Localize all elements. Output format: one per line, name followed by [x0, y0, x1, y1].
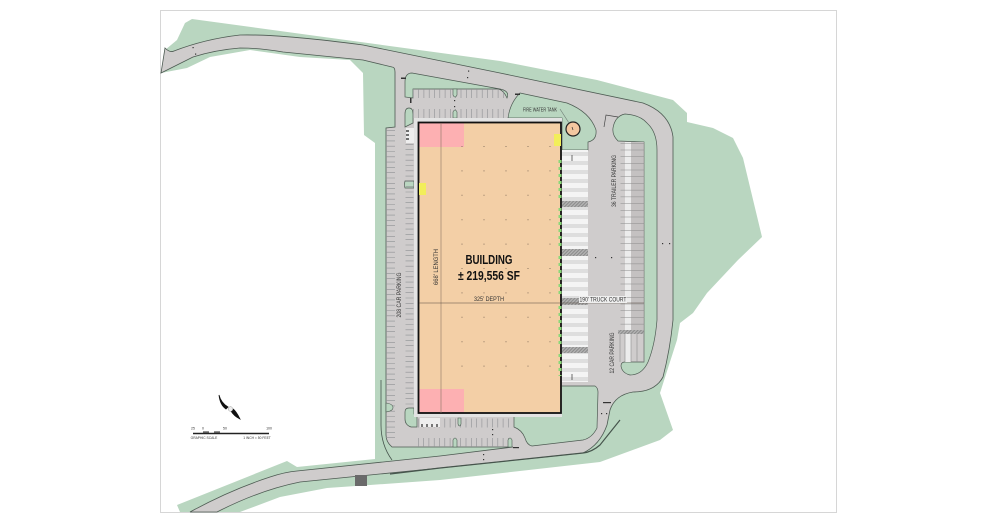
length label: 668' LENGTH [434, 249, 440, 285]
stop sign north-east [604, 115, 618, 127]
culvert [355, 475, 367, 486]
green island south-east [514, 386, 598, 446]
parking lot end islands [386, 89, 512, 447]
green island by yellow pad [404, 181, 414, 188]
truck court label [579, 296, 627, 304]
accessible parking stalls north [406, 128, 414, 143]
green island fire tank [508, 93, 596, 150]
length dimension line [440, 123, 442, 413]
graphic scale: 25 [191, 426, 195, 430]
lot corner curb [381, 380, 392, 460]
depth dimension line [419, 302, 644, 304]
pavement markings [192, 47, 670, 460]
pink corner office south [419, 389, 464, 413]
top parking lot stalls [413, 94, 508, 114]
dock doors [558, 160, 562, 376]
graphic scale: 0 [202, 426, 204, 430]
green island south of left lot [405, 408, 417, 427]
accessible parking stalls south [420, 418, 440, 427]
graphic scale: 50 [223, 426, 227, 430]
fire water tank [560, 109, 580, 136]
graphic scale: 100 [266, 426, 272, 430]
trailer parking label: 36 TRAILER PARKING [611, 155, 618, 207]
graphic scale: 1 INCH = 50 FEET [243, 436, 271, 440]
graphic scale [191, 426, 272, 440]
fire water tank label: FIRE WATER TANK [523, 108, 558, 114]
car parking label west: 208 CAR PARKING [396, 272, 403, 318]
building label: BUILDING [466, 252, 512, 267]
graphic scale: GRAPHIC SCALE [191, 436, 218, 440]
trailer parking stalls [618, 142, 644, 362]
building area label: ± 219,556 SF [458, 268, 520, 283]
green island north of left lot [405, 108, 413, 127]
north arrow [219, 395, 240, 419]
road and parking pavement [161, 35, 673, 512]
building [418, 122, 561, 413]
column grid dots [462, 146, 550, 390]
car parking label east: 12 CAR PARKING [609, 332, 616, 374]
pink corner office north [419, 123, 464, 147]
green island north-west [405, 73, 508, 98]
drawing frame [160, 10, 836, 512]
bottom parking lot stalls [418, 423, 513, 442]
yellow pad west [419, 183, 426, 195]
green island trailer parking [613, 114, 657, 375]
sidewalk around building [414, 118, 562, 417]
truck court label: 190' TRUCK COURT [580, 298, 627, 304]
yellow pad east [554, 134, 561, 146]
left parking lot stalls [390, 130, 410, 438]
access road lower edge line [390, 420, 620, 474]
depth label: 325' DEPTH [474, 297, 504, 303]
landscaped green area [161, 19, 762, 512]
building outline [418, 122, 561, 413]
truck dock apron [562, 150, 588, 382]
